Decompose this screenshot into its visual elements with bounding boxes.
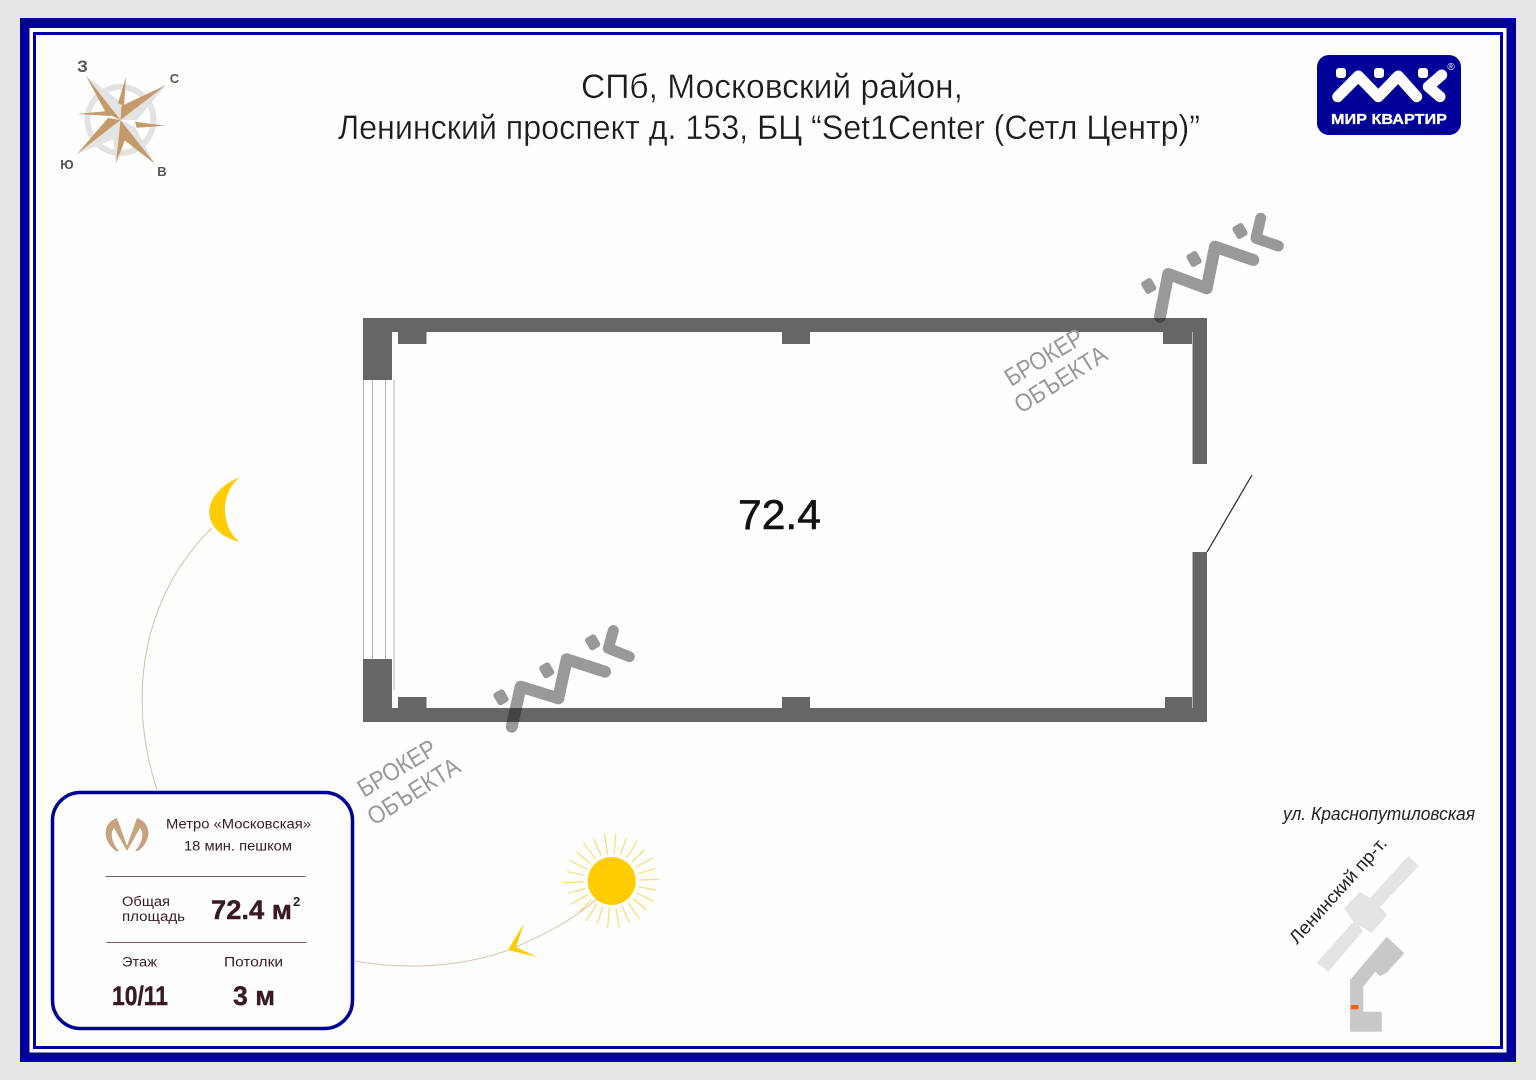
street label: ул. Краснопутиловская [1281, 804, 1475, 824]
window [364, 380, 394, 690]
sun path arc [142, 528, 597, 966]
logo: Мир Квартир: МИР КВАРТИР [1331, 111, 1447, 128]
logo: Мир Квартир: ® [1447, 62, 1455, 73]
watermark: lower logo [492, 631, 629, 727]
floor and ceiling: Этаж [122, 954, 157, 970]
avenue label: Ленинский пр-т. [1285, 833, 1391, 948]
icon: compass rose: З [77, 57, 88, 76]
metro text [166, 816, 311, 854]
total area: площадь [122, 909, 185, 924]
total area: Общая [122, 894, 170, 909]
total area: 2 [293, 894, 300, 909]
floor and ceiling: 3 м [233, 981, 275, 1011]
road shape [1317, 856, 1419, 972]
watermark: lower caption: БРОКЕР [353, 734, 442, 803]
title: Ленинский проспект д. 153, БЦ “Set1Center (Сетл Центр)” [338, 109, 1200, 147]
title: СПб, Московский район, [581, 68, 963, 106]
location map [1281, 804, 1475, 1032]
icon: compass rose [60, 57, 180, 179]
floor and ceiling: Потолки [224, 954, 283, 970]
icon: sun [565, 834, 659, 928]
total area [122, 894, 300, 925]
total area: 72.4 м [211, 895, 292, 925]
watermark: upper caption: БРОКЕР [1000, 323, 1089, 392]
panel: summary card [52, 792, 352, 1028]
title [338, 68, 1200, 147]
building shape [1350, 937, 1404, 1032]
area label: 72.4 [738, 491, 821, 538]
floor and ceiling: 10/11 [112, 981, 168, 1011]
icon: moon [209, 477, 240, 542]
watermark: upper caption: ОБЪЕКТА [1009, 340, 1113, 419]
watermark: lower caption: ОБЪЕКТА [362, 752, 466, 831]
logo: Мир Квартир [1317, 55, 1461, 135]
floor plan walls [363, 318, 1207, 722]
icon: compass rose: С [170, 71, 180, 86]
door [1207, 475, 1252, 552]
icon: compass rose: Ю [60, 157, 74, 172]
floor and ceiling [112, 954, 283, 1011]
unit marker [1351, 1005, 1358, 1009]
icon: compass rose: В [157, 164, 167, 179]
metro text: 18 мин. пешком [184, 838, 292, 854]
watermark: upper logo [1140, 218, 1278, 317]
icon: metro [106, 818, 148, 851]
metro text: Метро «Московская» [166, 816, 311, 832]
icon: arrow head [508, 923, 537, 957]
